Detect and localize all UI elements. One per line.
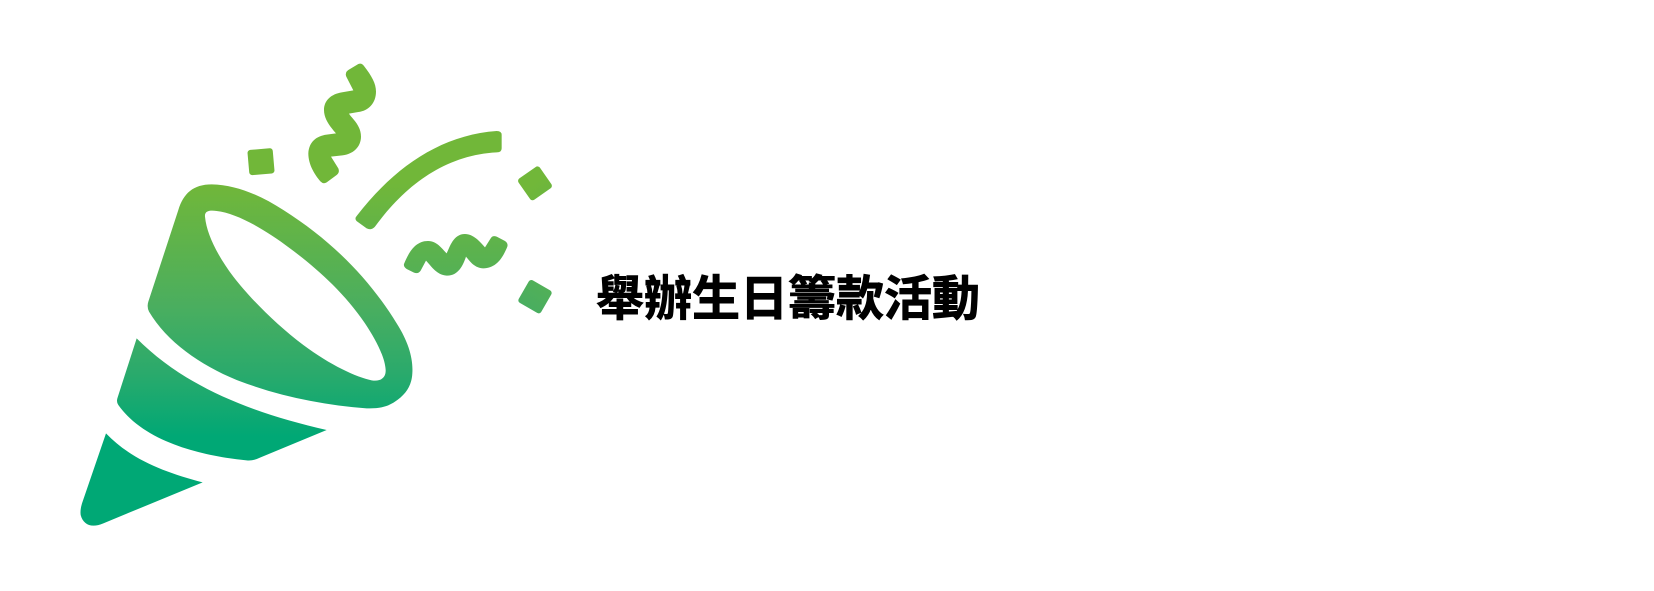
popper cone top band xyxy=(148,184,412,408)
confetti: square lower right xyxy=(517,279,553,314)
title: 舉辦生日籌款活動 xyxy=(596,273,980,326)
popper cone middle band xyxy=(117,338,327,460)
confetti: square left xyxy=(247,148,275,175)
confetti: square upper right xyxy=(517,165,553,201)
popper cone tip xyxy=(80,433,203,526)
confetti: lower squiggle xyxy=(404,234,508,276)
confetti: top squiggle xyxy=(308,64,376,183)
confetti: curved streamer xyxy=(355,131,502,229)
